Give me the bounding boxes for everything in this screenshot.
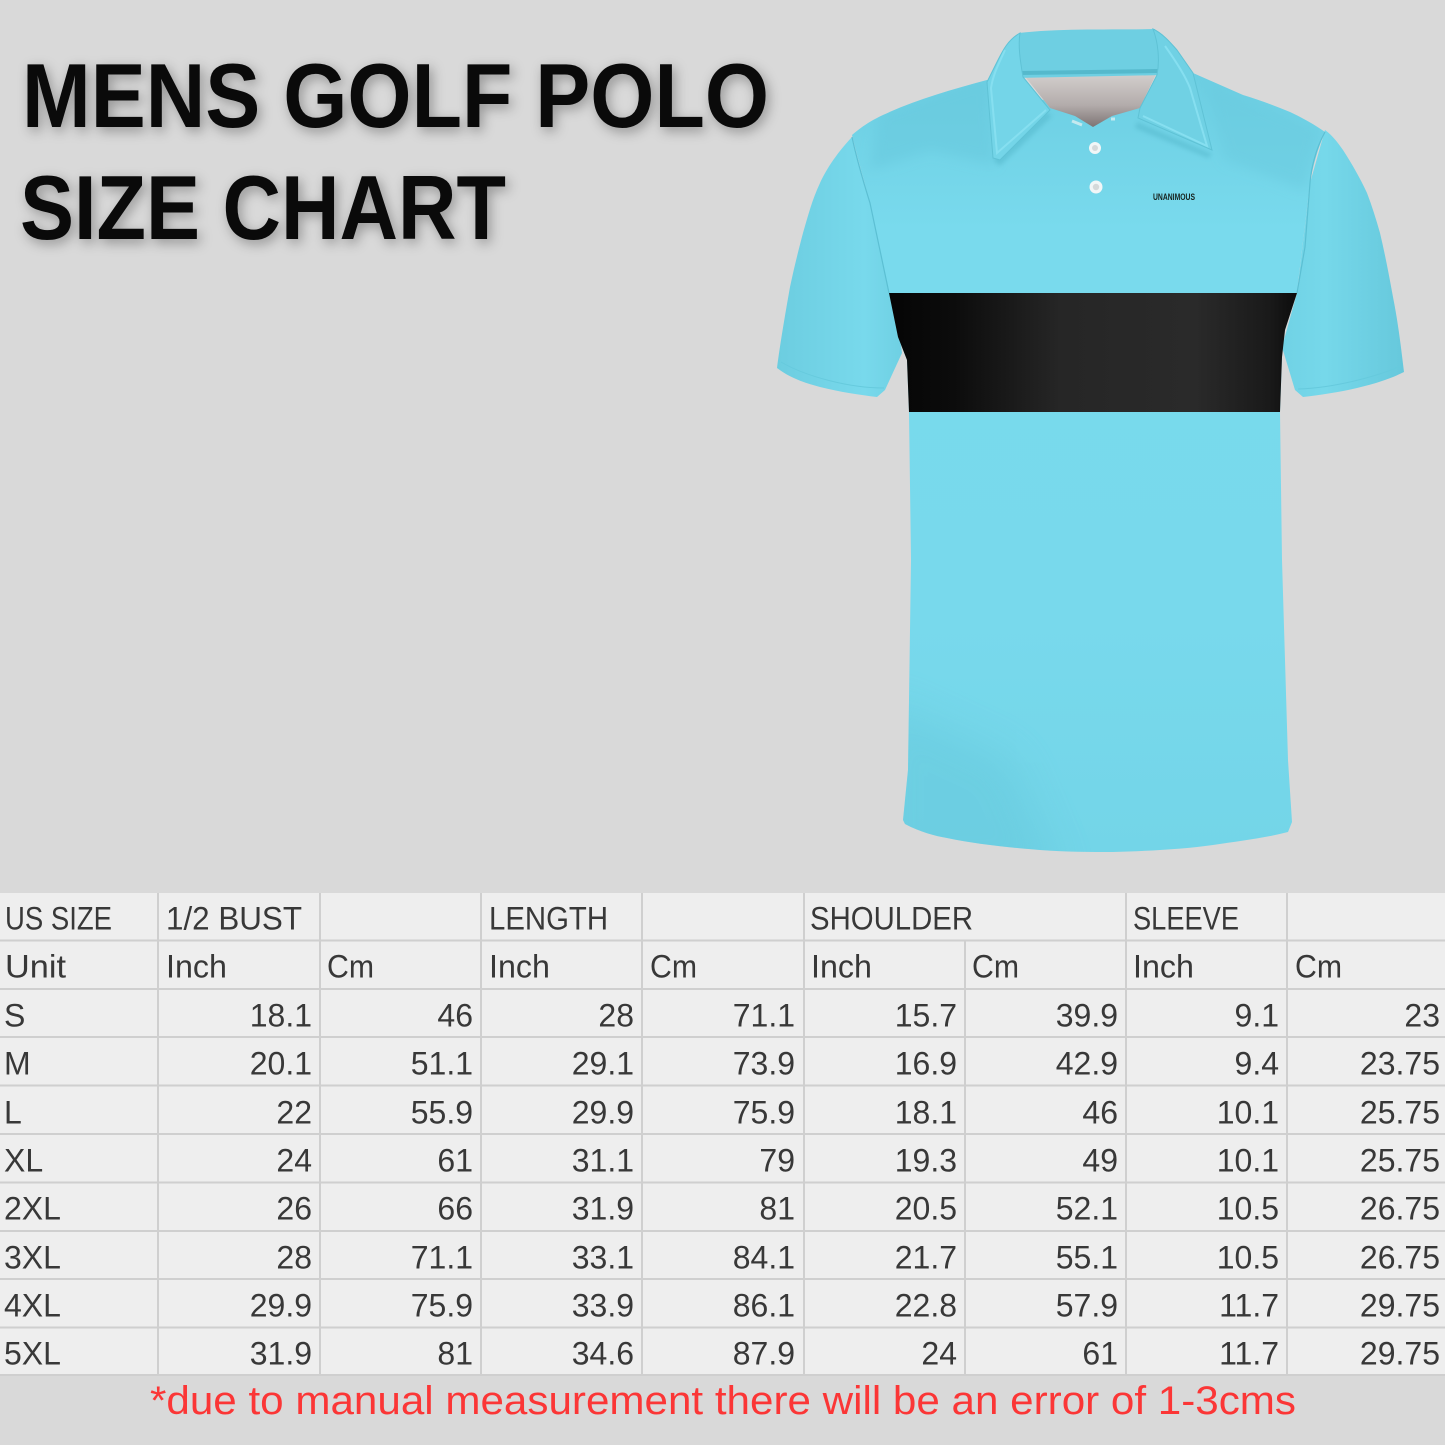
row XL: XL [4,1143,43,1179]
right collar flap [1138,29,1212,150]
row L: 22 [276,1095,312,1131]
row S: 71.1 [733,998,795,1034]
row 5XL: 29.75 [1360,1336,1440,1372]
title: SIZE CHART [20,158,506,259]
row 2XL [4,1191,1440,1227]
placket [1078,140,1080,232]
unit row: Unit [5,949,66,985]
title [20,46,769,259]
row S: 46 [437,998,473,1034]
row S: 39.9 [1056,998,1118,1034]
button 2 [1090,180,1102,194]
polo shirt illustration [777,29,1404,880]
row M: 42.9 [1056,1046,1118,1082]
row 5XL: 34.6 [572,1336,634,1372]
row 3XL: 26.75 [1360,1240,1440,1276]
row 4XL: 86.1 [733,1288,795,1324]
header row: SLEEVE [1133,901,1239,937]
row 3XL: 3XL [4,1240,61,1276]
row M: 20.1 [250,1046,312,1082]
sleeve hems [781,362,1401,389]
row 5XL: 81 [437,1336,473,1372]
header row: LENGTH [489,901,608,937]
row L: 55.9 [411,1095,473,1131]
chest stripe [889,293,1297,412]
row XL: 49 [1082,1143,1118,1179]
row XL: 79 [759,1143,795,1179]
row 5XL: 24 [921,1336,957,1372]
row 3XL: 21.7 [895,1240,957,1276]
row L: 18.1 [895,1095,957,1131]
row XL [4,1143,1440,1179]
row 4XL: 33.9 [572,1288,634,1324]
row 2XL: 81 [759,1191,795,1227]
row XL: 31.1 [572,1143,634,1179]
row L: 10.1 [1217,1095,1279,1131]
row 3XL: 33.1 [572,1240,634,1276]
row XL: 24 [276,1143,312,1179]
unit row: Cm [972,949,1019,985]
row 4XL: 29.75 [1360,1288,1440,1324]
row 5XL: 5XL [4,1336,61,1372]
row 2XL: 52.1 [1056,1191,1118,1227]
row 2XL: 26.75 [1360,1191,1440,1227]
unit row: Inch [489,949,550,985]
left sleeve [777,137,902,397]
row S: S [4,998,25,1034]
left collar flap [987,33,1050,160]
row 4XL: 4XL [4,1288,61,1324]
unit row [5,949,1342,985]
row S: 9.1 [1235,998,1279,1034]
row M: 29.1 [572,1046,634,1082]
row 3XL: 55.1 [1056,1240,1118,1276]
row M [4,1046,1440,1082]
unit row: Inch [811,949,872,985]
right collar shadow [1135,122,1212,158]
row 5XL [4,1336,1440,1372]
footnote: *due to manual measurement there will be an error of 1-3cms [150,1379,1296,1423]
row 5XL: 61 [1082,1336,1118,1372]
body shading [884,82,1038,850]
row 2XL: 10.5 [1217,1191,1279,1227]
row 2XL: 26 [276,1191,312,1227]
row 4XL: 22.8 [895,1288,957,1324]
row 2XL: 20.5 [895,1191,957,1227]
row 3XL: 84.1 [733,1240,795,1276]
row L: 29.9 [572,1095,634,1131]
unit row: Inch [166,949,227,985]
row 5XL: 31.9 [250,1336,312,1372]
shirt body [852,73,1325,852]
row 2XL: 2XL [4,1191,61,1227]
unit row: Cm [1295,949,1342,985]
row 3XL: 71.1 [411,1240,473,1276]
row S [4,998,1440,1034]
row M: 9.4 [1235,1046,1279,1082]
left collar shadow [993,112,1052,166]
row 3XL [4,1240,1440,1276]
row 4XL [4,1288,1440,1324]
button 1 [1089,142,1101,154]
row S: 23 [1404,998,1440,1034]
armhole seams [852,132,1325,293]
row S: 18.1 [250,998,312,1034]
row XL: 25.75 [1360,1143,1440,1179]
row M: 73.9 [733,1046,795,1082]
row 5XL: 87.9 [733,1336,795,1372]
size table [0,893,1445,1375]
header row: US SIZE [5,901,112,937]
row 4XL: 11.7 [1219,1288,1279,1324]
row 4XL: 57.9 [1056,1288,1118,1324]
logo: UNANIMOUS [1153,192,1195,202]
unit row: Cm [650,949,697,985]
table background [0,893,1445,1375]
inner buttons [1072,119,1115,125]
row L: 25.75 [1360,1095,1440,1131]
row XL: 10.1 [1217,1143,1279,1179]
header row: 1/2 BUST [166,901,302,937]
row 4XL: 29.9 [250,1288,312,1324]
row M: 23.75 [1360,1046,1440,1082]
header row: SHOULDER [810,901,973,937]
unit row: Cm [327,949,374,985]
row 3XL: 28 [276,1240,312,1276]
row 4XL: 75.9 [411,1288,473,1324]
back collar [1015,29,1165,78]
row S: 15.7 [895,998,957,1034]
row XL: 61 [437,1143,473,1179]
row S: 28 [598,998,634,1034]
row L: L [4,1095,22,1131]
row 2XL: 66 [437,1191,473,1227]
row 3XL: 10.5 [1217,1240,1279,1276]
title: MENS GOLF POLO [22,46,769,147]
row 2XL: 31.9 [572,1191,634,1227]
row M: 51.1 [411,1046,473,1082]
unit row: Inch [1133,949,1194,985]
row 5XL: 11.7 [1219,1336,1279,1372]
neck opening [1023,72,1157,127]
header row [5,901,1239,937]
row XL: 19.3 [895,1143,957,1179]
row M: 16.9 [895,1046,957,1082]
row L [4,1095,1440,1131]
row M: M [4,1046,31,1082]
row L: 75.9 [733,1095,795,1131]
right sleeve [1282,130,1404,397]
row L: 46 [1082,1095,1118,1131]
